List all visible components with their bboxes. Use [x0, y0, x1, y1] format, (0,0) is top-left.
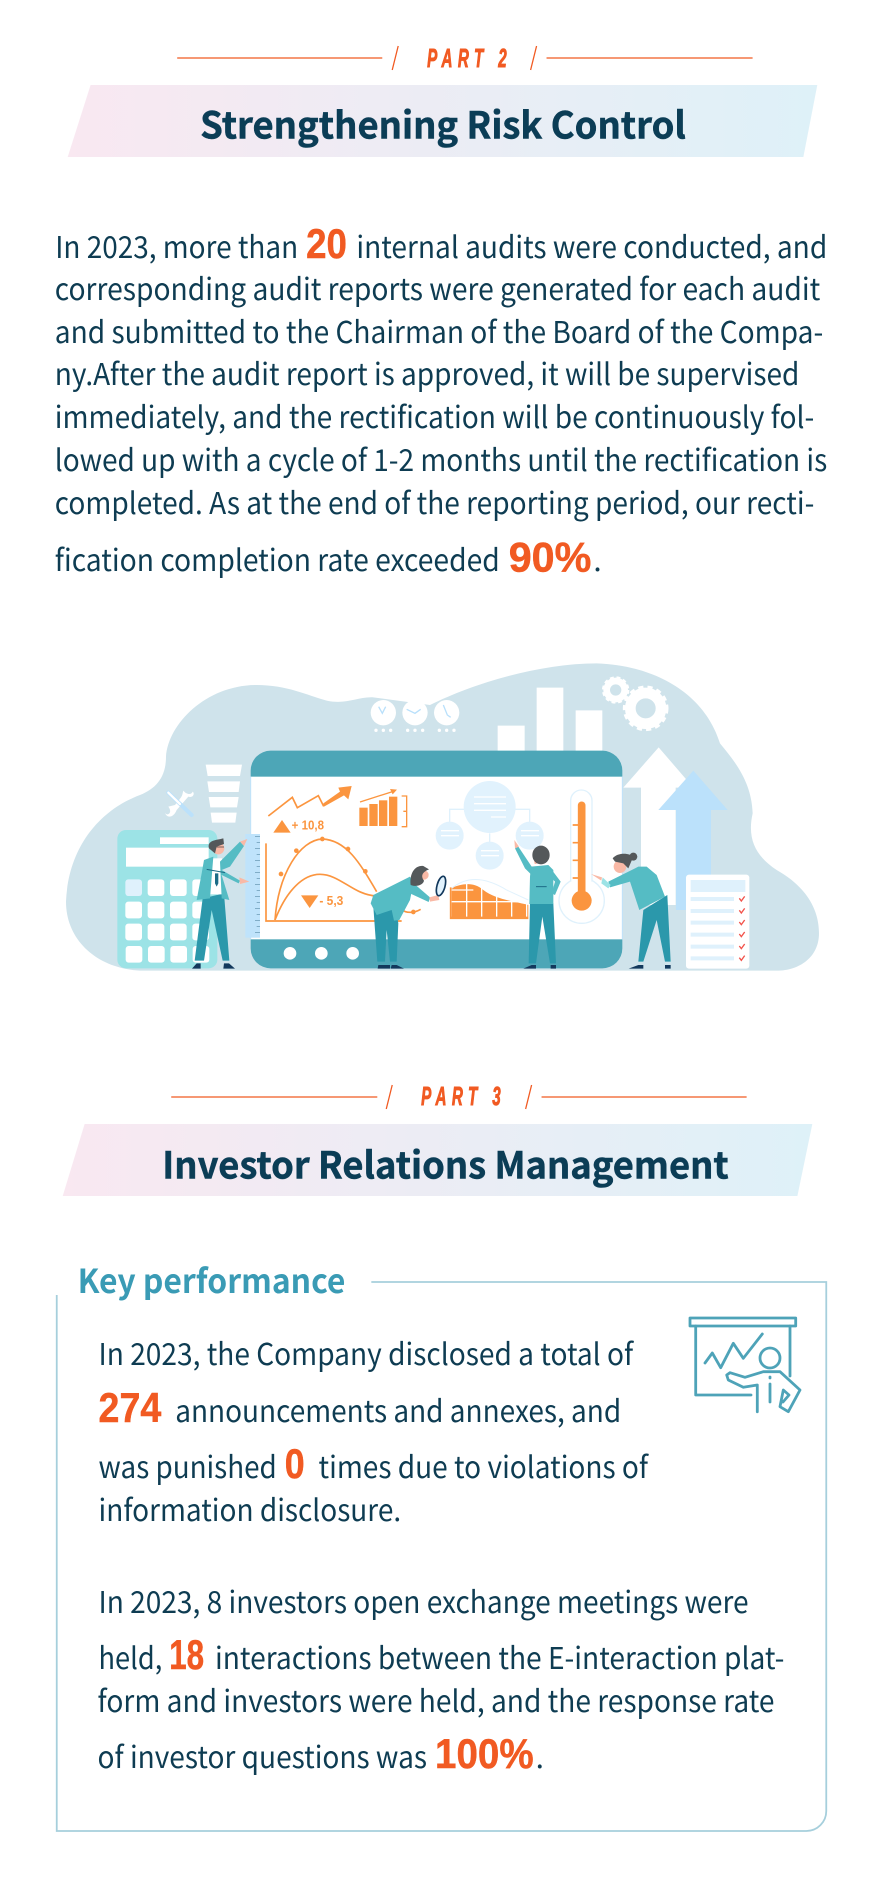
- chart: bars: [359, 789, 407, 827]
- figure: woman pointing: [591, 853, 671, 969]
- chart: trend arrow: [268, 786, 352, 816]
- section header: part 3: PART 3: [421, 1083, 506, 1111]
- section header: part 2: [177, 45, 753, 73]
- icon: gears: [604, 678, 666, 729]
- illustration: team analysing risk dashboard: [66, 663, 819, 971]
- panel heading: key performance: Key performance: [78, 1256, 345, 1303]
- text block: internal audit paragraph: internal audits were conducted, and: [356, 223, 827, 267]
- heading banner: strengthening risk control: [68, 85, 817, 157]
- text block: internal audit paragraph: 90%: [509, 533, 591, 581]
- text block: internal audit paragraph: ny.After the audit report is approved, it will be supervised: [55, 350, 799, 394]
- stat: down 5,3: - 5,3: [319, 894, 343, 908]
- arrows: [623, 747, 728, 910]
- heading banner: strengthening risk control: Strengthening Risk Control: [200, 95, 686, 150]
- text block: investor meetings: [98, 1578, 784, 1777]
- dashboard screen: [251, 751, 622, 968]
- chart: curves: [266, 837, 421, 921]
- calculator: [117, 830, 217, 968]
- text block: internal audit paragraph: .: [593, 536, 602, 580]
- funnel stack: [206, 765, 242, 823]
- text block: internal audit paragraph: and submitted to the Chairman of the Board of the Compa-: [55, 308, 823, 352]
- text block: investor meetings: of investor questions was: [98, 1733, 427, 1777]
- icon: clocks: [371, 700, 459, 732]
- text block: internal audit paragraph: [55, 220, 827, 581]
- ruler: [245, 834, 260, 938]
- stat: up 10,8: [273, 818, 324, 833]
- text block: investor meetings: .: [536, 1733, 544, 1777]
- figure: man with ruler: [192, 838, 249, 969]
- heading banner: investor relations management: [63, 1124, 812, 1196]
- section header: part 3: [171, 1083, 747, 1111]
- text block: disclosure: announcements and annexes, and: [175, 1387, 621, 1431]
- text block: disclosure: times due to violations of: [319, 1443, 649, 1487]
- figure: woman with magnifier: [371, 866, 447, 969]
- text block: investor meetings: held,: [99, 1634, 162, 1678]
- icon: presenter at board: [690, 1318, 800, 1412]
- area chart: [450, 875, 528, 918]
- stat: down 5,3: [301, 894, 343, 908]
- text block: internal audit paragraph: lowed up with a cycle of 1-2 months until the rectification is: [55, 436, 827, 480]
- section header: part 2: PART 2: [427, 45, 512, 73]
- text block: investor meetings: form and investors were held, and the response rate: [98, 1677, 774, 1721]
- figure: man pointing at diagram: [514, 840, 561, 969]
- text block: internal audit paragraph: 20: [306, 220, 347, 267]
- icon: tools: [165, 791, 194, 817]
- thermometer: [559, 790, 604, 923]
- text block: internal audit paragraph: corresponding audit reports were generated for each audit: [55, 265, 820, 309]
- heading banner: investor relations management: Investor Relations Management: [162, 1135, 729, 1190]
- text block: investor meetings: 18: [169, 1631, 204, 1678]
- text block: investor meetings: In 2023, 8 investors open exchange meetings were: [99, 1578, 749, 1622]
- text block: investor meetings: 100%: [435, 1730, 534, 1777]
- text block: disclosure: In 2023, the Company disclosed a total of: [99, 1330, 634, 1374]
- text block: internal audit paragraph: completed. As at the end of the reporting period, our recti-: [55, 479, 814, 523]
- text block: investor meetings: interactions between the E-interaction plat-: [215, 1634, 784, 1678]
- background bars: [498, 688, 602, 752]
- text block: disclosure: information disclosure.: [99, 1486, 401, 1530]
- stat: up 10,8: + 10,8: [292, 818, 324, 832]
- text block: internal audit paragraph: fication completion rate exceeded: [55, 536, 500, 580]
- text block: disclosure: [99, 1330, 649, 1530]
- text block: disclosure: 274: [99, 1384, 162, 1431]
- org diagram: [436, 781, 544, 870]
- text block: internal audit paragraph: immediately, and the rectification will be continuously fol-: [55, 393, 814, 437]
- text block: disclosure: 0: [285, 1440, 305, 1487]
- checklist: [686, 875, 749, 969]
- text block: disclosure: was punished: [99, 1443, 277, 1487]
- text block: internal audit paragraph: In 2023, more than: [55, 223, 298, 267]
- panel: key performance: [57, 1256, 826, 1831]
